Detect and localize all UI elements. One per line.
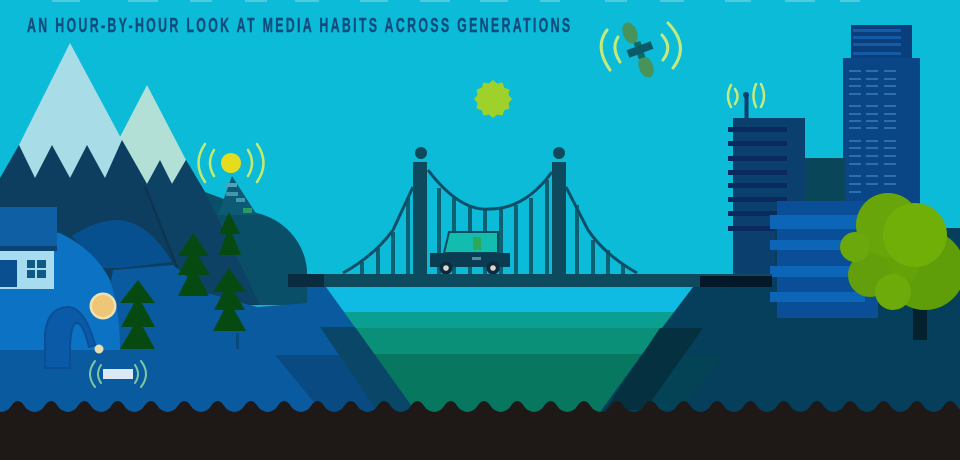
bridge cables	[343, 170, 637, 273]
snow peak: small	[120, 85, 186, 184]
water and river bands	[320, 287, 710, 414]
tower	[218, 176, 257, 215]
dark mountain	[0, 140, 260, 310]
truck	[430, 232, 510, 274]
buildings	[728, 25, 920, 278]
mountain mid layer	[147, 160, 260, 305]
tree: small	[219, 212, 241, 255]
antenna	[743, 92, 749, 118]
teal hill	[205, 192, 307, 305]
person	[45, 292, 116, 368]
bridge towers	[413, 147, 566, 276]
office tower body	[843, 58, 920, 233]
office tower top	[851, 25, 912, 59]
blue block building	[770, 201, 878, 318]
house	[0, 207, 57, 289]
tree: front	[120, 280, 155, 349]
scalloped black ground	[0, 401, 960, 460]
left ground	[0, 265, 416, 412]
clipped title remnants	[52, 0, 860, 2]
teal low building	[803, 158, 845, 202]
sun	[474, 80, 512, 118]
satellite signal waves	[601, 23, 680, 70]
cliff shadow: upper	[320, 327, 416, 412]
deck left end	[288, 274, 324, 287]
mid blue hill	[72, 220, 172, 268]
satellite	[619, 20, 657, 80]
deck right end	[700, 276, 772, 287]
right ground	[600, 228, 960, 412]
tree: right	[213, 268, 246, 349]
bridge	[288, 147, 772, 287]
snow peak: large	[19, 43, 122, 178]
bridge deck	[288, 274, 772, 287]
antenna signal waves	[728, 84, 764, 107]
right ground shadow: upper	[605, 328, 703, 410]
subtitle: AN HOUR-BY-HOUR LOOK AT MEDIA HABITS ACROSS GENERATIONS	[27, 14, 570, 37]
tower beacon	[221, 153, 241, 173]
tree: large green	[840, 193, 960, 340]
bright blue hill	[0, 226, 120, 350]
cliff shadow: lower	[275, 355, 395, 412]
tree: middle	[178, 233, 210, 296]
tower signal waves	[198, 144, 264, 182]
right ground shadow: lower	[625, 356, 722, 410]
bridge hangers	[360, 180, 625, 276]
mountain ridge line	[145, 187, 177, 267]
striped building	[728, 118, 805, 278]
phone with signal	[90, 361, 146, 387]
